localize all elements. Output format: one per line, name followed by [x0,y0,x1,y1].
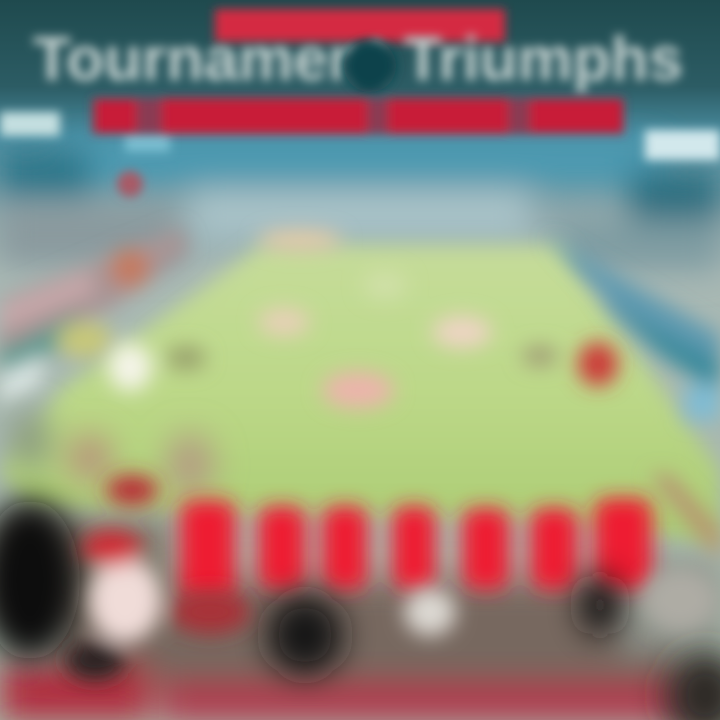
upper stands blue glow [0,140,720,270]
left side stands [0,228,190,405]
crowd base [0,410,720,720]
top red ribbon [215,9,505,42]
side lights [0,112,720,197]
title centre emblem [344,40,396,92]
main title: Tournament Triumphs [33,25,683,94]
title banner [33,9,683,134]
crowd silhouettes [0,500,720,720]
pitch players [108,230,618,408]
crowd details [65,475,720,680]
pitch [0,245,720,545]
crowd red flags [180,498,652,600]
right side stands [545,235,720,420]
red subtitle band [92,98,624,134]
